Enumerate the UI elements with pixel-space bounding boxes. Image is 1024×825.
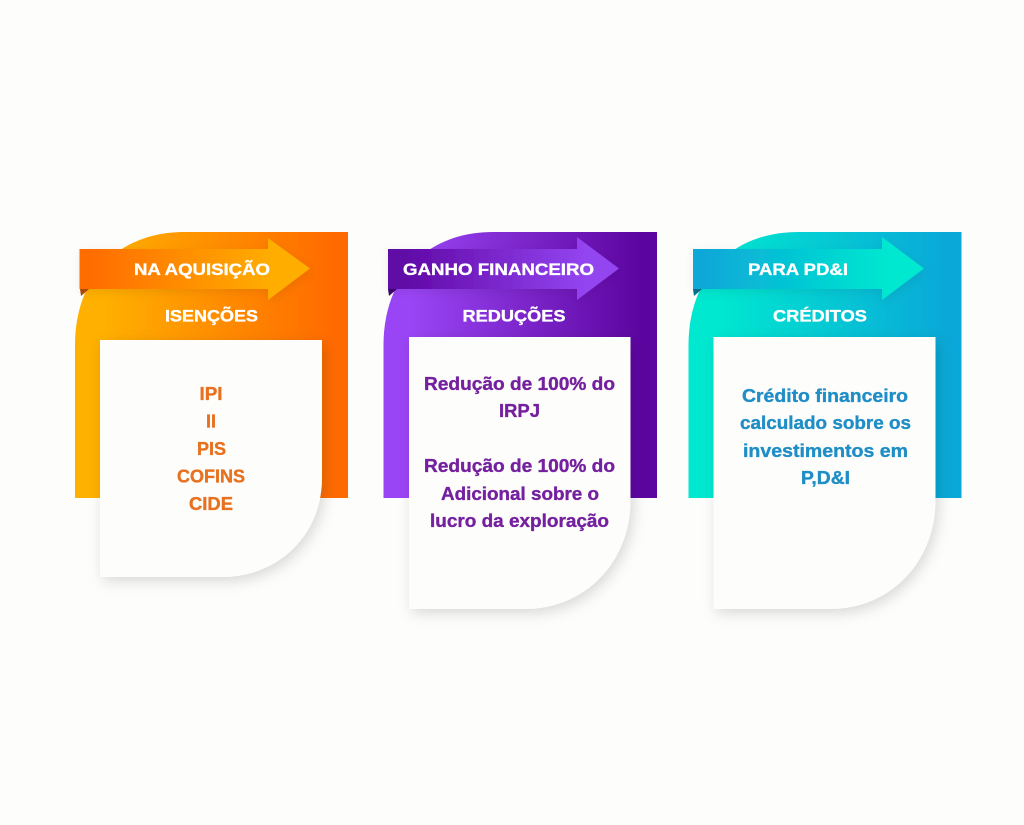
card text: Adicional sobre o — [441, 484, 599, 504]
card text: IPI — [200, 384, 222, 404]
white card — [409, 337, 630, 609]
card text: Crédito financeiro — [742, 386, 908, 406]
colored background shape — [384, 232, 657, 498]
panel: na aquisição — [75, 232, 348, 577]
colored background shape — [688, 232, 962, 498]
white card — [100, 340, 322, 577]
card text: COFINS — [177, 466, 245, 486]
heading: ISENÇÕES — [165, 306, 258, 326]
card text: P,D&I — [801, 468, 850, 488]
card text: Redução de 100% do — [424, 456, 615, 476]
banner title: NA AQUISIÇÃO — [134, 259, 270, 279]
arrow banner — [80, 238, 310, 300]
arrow fold — [80, 289, 89, 296]
heading: CRÉDITOS — [773, 306, 867, 326]
arrow banner — [388, 237, 619, 300]
card text: PIS — [197, 439, 226, 459]
banner title: GANHO FINANCEIRO — [403, 260, 594, 279]
banner title: PARA PD&I — [748, 260, 848, 279]
arrow banner — [693, 237, 924, 300]
white card — [714, 337, 936, 609]
panel: ganho financeiro — [384, 232, 657, 609]
card text — [424, 374, 615, 531]
card text: CIDE — [189, 494, 233, 514]
card text: II — [206, 412, 216, 432]
card text: investimentos em — [743, 441, 908, 461]
card text — [740, 386, 911, 488]
arrow fold — [693, 289, 702, 296]
card text: lucro da exploração — [430, 511, 609, 531]
arrow fold — [388, 289, 397, 296]
panel: para pd&i — [688, 232, 962, 609]
card text: calculado sobre os — [740, 413, 911, 433]
card text: IRPJ — [499, 401, 540, 421]
card text: Redução de 100% do — [424, 374, 615, 394]
heading: REDUÇÕES — [462, 306, 566, 326]
card text — [177, 384, 245, 514]
colored background shape — [75, 232, 348, 498]
